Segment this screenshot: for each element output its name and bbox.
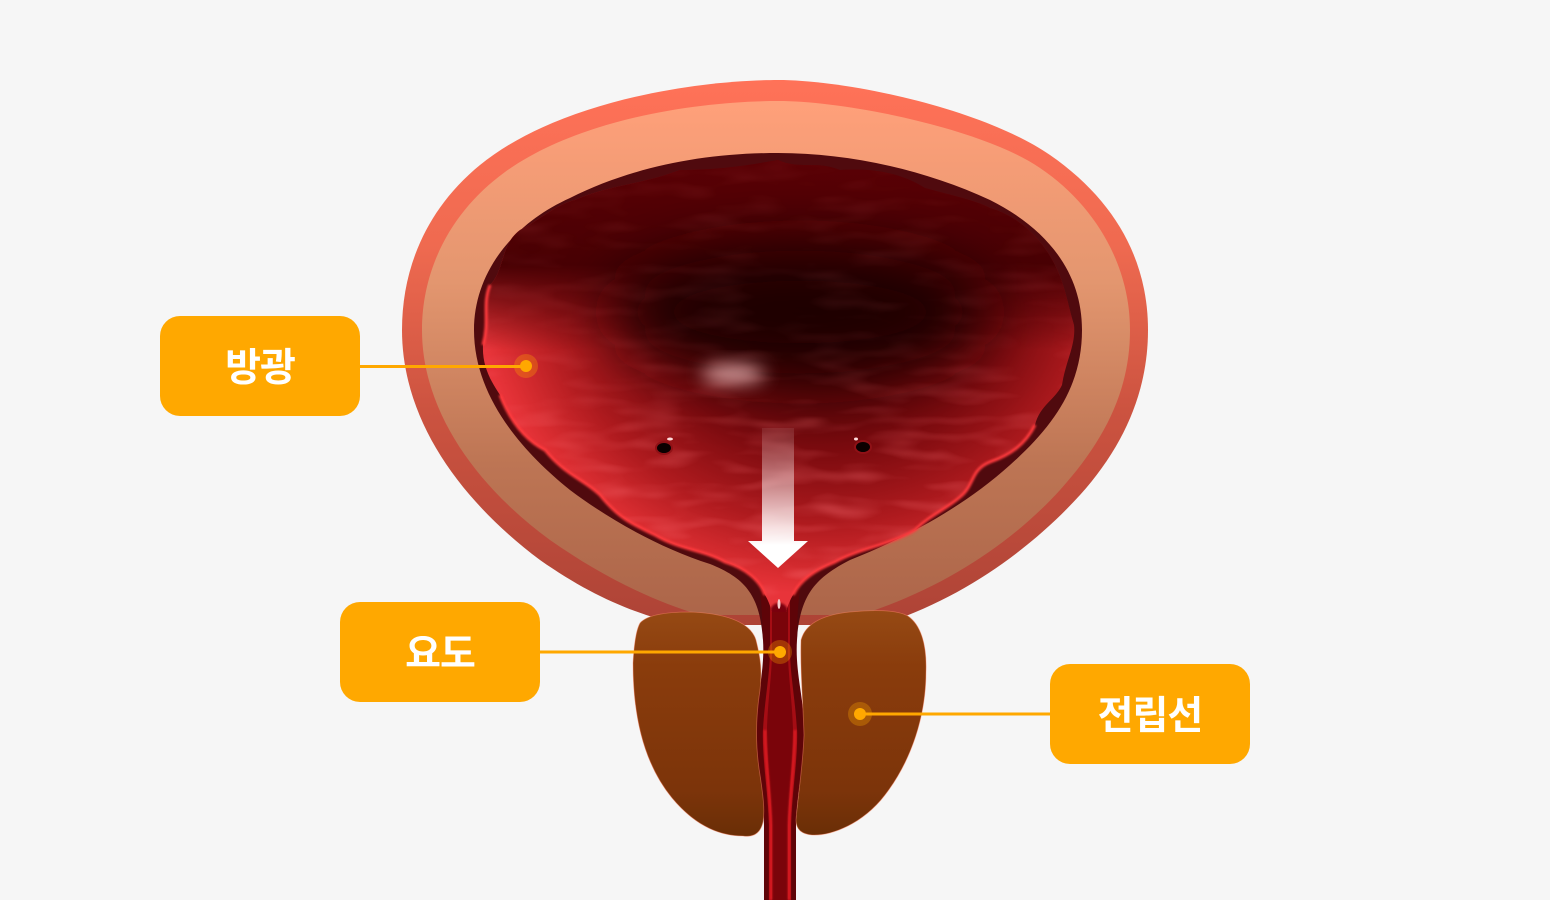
infographic stage: [160, 80, 1250, 900]
right ureter opening: [854, 438, 871, 453]
leader line: urethra: [540, 640, 792, 664]
urethra highlight between lobes: [778, 599, 780, 609]
bladder inner highlight: [701, 366, 765, 382]
label: prostate: 전립선: [1098, 695, 1202, 738]
label: bladder: [160, 316, 360, 416]
prostate right lobe: [796, 611, 926, 835]
label: urethra: [340, 602, 540, 702]
left ureter opening: [656, 438, 673, 454]
prostate left lobe: [633, 612, 764, 836]
urethra: [755, 590, 805, 900]
bladder cavity wall: [470, 150, 1090, 621]
anatomical illustration: [360, 80, 1148, 900]
label: prostate: [1050, 664, 1250, 764]
arrow: urine flow downward: [748, 428, 808, 568]
bladder muscle layer: [422, 101, 1130, 615]
leader line: prostate: [848, 702, 1050, 726]
bladder outer wall: [402, 80, 1148, 625]
label: urethra: 요도: [405, 633, 475, 676]
label: bladder: 방광: [225, 347, 295, 390]
leader line: bladder: [360, 354, 538, 378]
bladder cavity dark lining: [474, 153, 1082, 640]
